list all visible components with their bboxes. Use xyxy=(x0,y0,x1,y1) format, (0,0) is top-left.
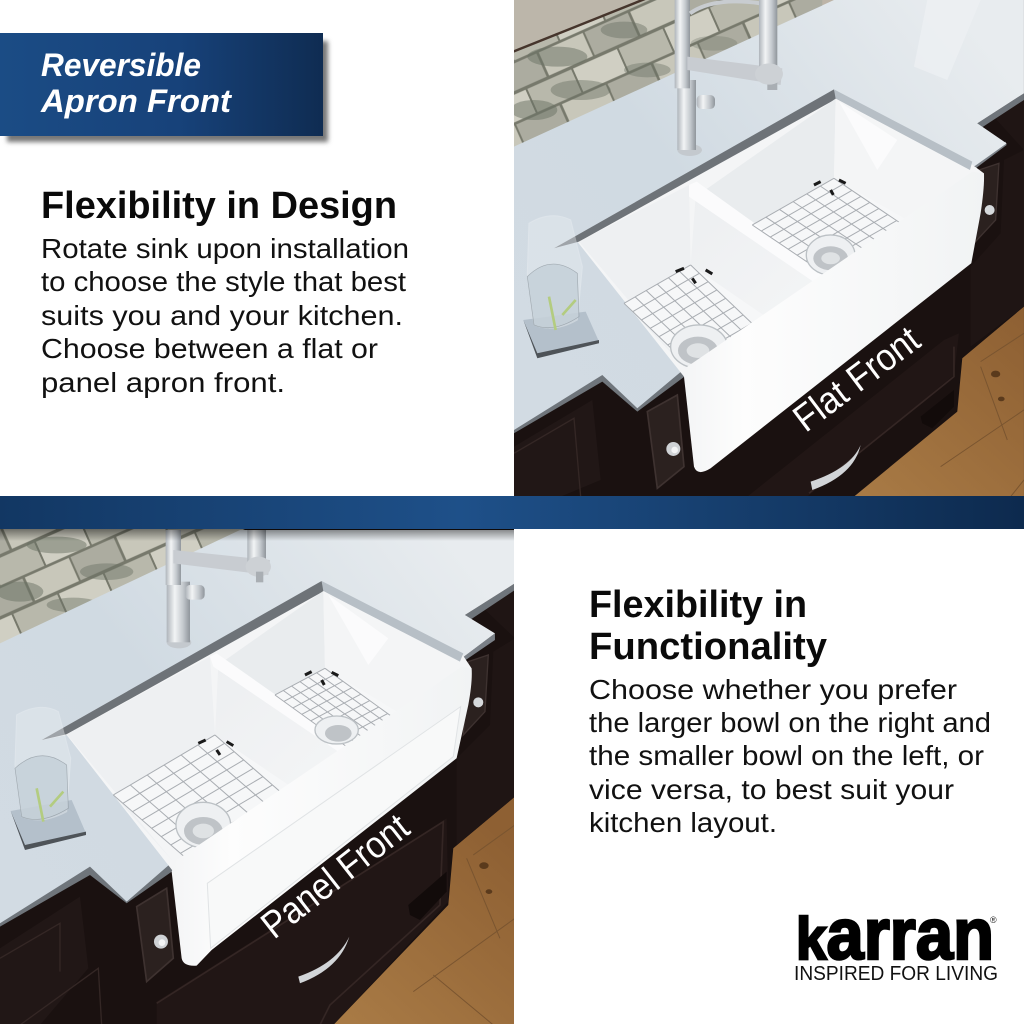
logo: Karran: ® xyxy=(990,915,997,925)
logo: Karran: karran xyxy=(796,895,994,975)
heading: Flexibility in Functionality: Flexibility in xyxy=(589,584,807,626)
wood floor xyxy=(854,307,1024,497)
faucet xyxy=(675,0,783,156)
text block: functionality description: Choose whether you prefer xyxy=(589,674,957,705)
drains xyxy=(671,235,855,368)
glasses and napkin xyxy=(523,216,599,358)
right door with knob xyxy=(975,100,1024,308)
left cabinet door xyxy=(0,922,102,1024)
banner: Reversible Apron Front: Reversible xyxy=(41,47,201,83)
text block: design description: to choose the style that best xyxy=(41,266,406,297)
label: Flat Front: Flat Front xyxy=(786,318,928,440)
banner: Reversible Apron Front xyxy=(0,33,328,142)
text block: design description: panel apron front. xyxy=(41,367,285,398)
text block: functionality description: kitchen layout. xyxy=(589,807,777,838)
heading: Flexibility in Functionality xyxy=(589,584,827,668)
glasses and napkin xyxy=(11,707,86,850)
sink bowls xyxy=(554,89,984,377)
brick wall xyxy=(0,529,245,644)
apron: flat front xyxy=(684,172,984,472)
countertop xyxy=(514,0,1024,433)
text block: design description xyxy=(41,233,409,398)
narrow door with knob xyxy=(647,395,684,488)
drying grids xyxy=(113,668,397,862)
canister xyxy=(822,0,834,6)
text block: design description: Rotate sink upon installation xyxy=(41,233,409,264)
countertop xyxy=(0,530,515,927)
drying grids xyxy=(624,178,899,348)
text block: functionality description xyxy=(589,674,991,838)
heading: Flexibility in Design: Flexibility in Design xyxy=(41,185,397,227)
brick wall xyxy=(514,0,822,147)
text block: design description: Choose between a flat or xyxy=(41,333,378,364)
text block: functionality description: the larger bowl on the right and xyxy=(589,707,991,738)
cabinet drawer xyxy=(808,346,955,494)
logo: Karran: INSPIRED FOR LIVING xyxy=(794,963,998,985)
divider band xyxy=(0,496,1024,541)
banner: Reversible Apron Front: Apron Front xyxy=(40,83,232,119)
text block: functionality description: the smaller bowl on the left, or xyxy=(589,740,984,771)
left cabinet door xyxy=(514,417,582,496)
faucet xyxy=(166,530,271,648)
narrow door with knob xyxy=(137,888,173,982)
drains xyxy=(176,716,358,848)
text block: design description: suits you and your kitchen. xyxy=(41,300,403,331)
heading: Flexibility in Functionality: Functionality xyxy=(589,626,827,668)
cabinet drawer xyxy=(157,818,448,1024)
text block: functionality description: vice versa, to best suit your xyxy=(589,774,954,805)
photo: flat front sink xyxy=(511,0,1024,500)
right door with knob xyxy=(462,654,514,822)
sink bowls xyxy=(42,581,472,872)
wood floor xyxy=(333,797,515,1024)
label: Panel Front: Panel Front xyxy=(254,806,418,947)
apron: panel front xyxy=(172,667,472,966)
photo: panel front sink xyxy=(0,525,515,1024)
